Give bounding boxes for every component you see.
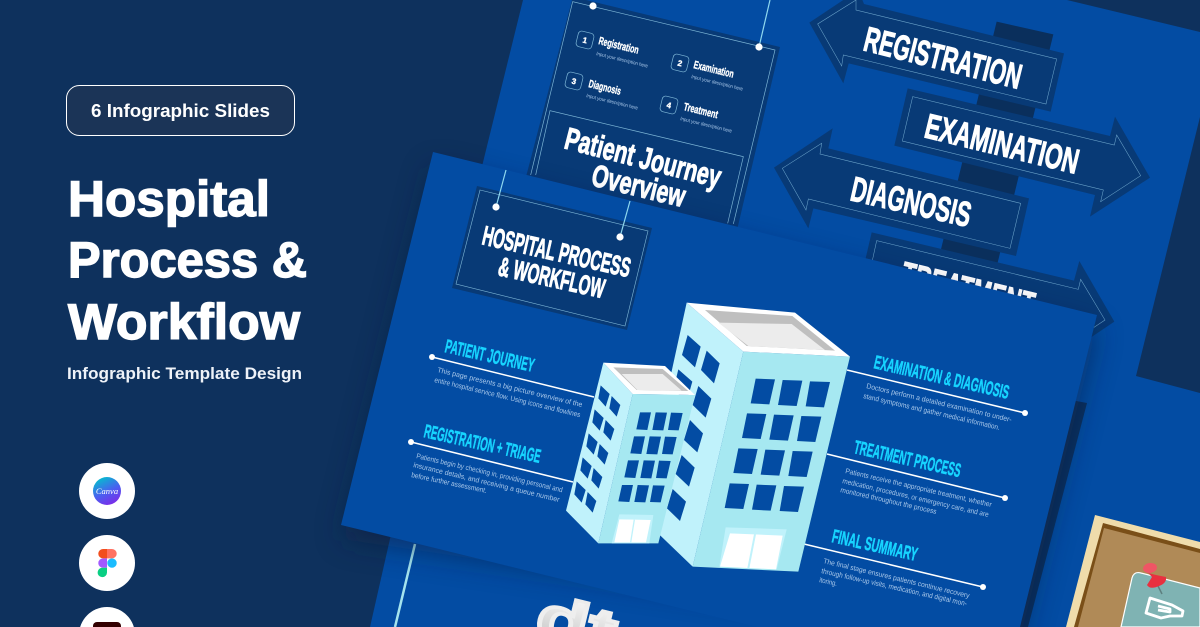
text block: treatment process: monitored throughout the process [840, 485, 938, 516]
step label: diagnosis: Diagnosis [587, 78, 622, 98]
card title line 2: Overview [588, 158, 689, 214]
main slide shadow [341, 166, 1097, 627]
label: examination: EXAMINATION [921, 107, 1083, 182]
panel: back slide patient journey [470, 0, 1200, 627]
icon: number box 4: 4 [666, 101, 673, 111]
sign pole [940, 22, 1053, 267]
step label: examination: Examination [692, 59, 735, 81]
cork inner edge [1074, 523, 1200, 627]
connector lines [408, 354, 1028, 590]
icon: hand [1146, 598, 1183, 618]
cork frame [1066, 515, 1200, 627]
text block: final summary [819, 526, 971, 608]
icon: number box 3: 3 [571, 77, 578, 87]
title: Process & [68, 232, 307, 288]
text block: final summary: FINAL SUMMARY [830, 526, 920, 566]
step label: treatment: Treatment [682, 101, 719, 121]
text block: patient journey: entire hospital service flow. Using icons and flowlines [434, 375, 582, 419]
text block: patient journey: This page presents a big picture overview of the [437, 365, 583, 409]
text block: final summary: itoring. [819, 575, 838, 588]
arrow: diagnosis [774, 128, 1029, 256]
text block: examination and diagnosis [863, 352, 1013, 432]
panel: lower slide [370, 530, 800, 627]
arrow: registration [809, 0, 1064, 112]
shadow strip [1005, 398, 1087, 627]
title: Workflow [68, 294, 300, 350]
icon: canva: Canva [96, 486, 118, 496]
hanging line and pins [589, 0, 770, 51]
signpost arrows [774, 0, 1150, 362]
text block: treatment process: medication, procedures, or emergency care, and are [842, 476, 990, 519]
icon: third tool [79, 607, 135, 627]
label: registration: REGISTRATION [860, 20, 1026, 97]
icon: number box 1 [575, 30, 595, 50]
text block: examination and diagnosis: Doctors perform a detailed examination to under- [866, 381, 1013, 424]
tall building [640, 303, 850, 572]
icon: canva [79, 463, 135, 519]
step description 4: Input your description here [680, 116, 733, 135]
panel: corkboard slide [1005, 398, 1200, 627]
text block: registration and triage: insurance details, and receiving a queue number [413, 460, 561, 504]
cork surface [1078, 528, 1200, 627]
text block: registration and triage: REGISTRATION + TRIAGE [422, 421, 543, 468]
illustration: hospital buildings [566, 303, 850, 572]
badge: slide count [66, 86, 294, 136]
icon: red pin [1142, 562, 1166, 594]
text block: registration and triage: Patients begin by checking in, providing personal and [416, 451, 564, 494]
badge: slide count: 6 Infographic Slides [91, 100, 270, 121]
text block: final summary: through follow-up visits, medication, and digital mon- [821, 566, 968, 608]
icon: figma [79, 535, 135, 591]
paper card [1121, 573, 1200, 627]
label: treatment: TREATMENT [897, 255, 1038, 325]
step label: registration: Registration [597, 35, 640, 57]
title line 1: HOSPITAL PROCESS [480, 221, 634, 283]
icon: number box 4 [659, 95, 679, 115]
icon: number box 1: 1 [582, 36, 589, 46]
icon: number box 2: 2 [677, 59, 684, 69]
arrow: treatment [858, 232, 1114, 362]
title line 2: & WORKFLOW [496, 252, 608, 304]
label: diagnosis: DIAGNOSIS [847, 170, 975, 235]
text block: examination and diagnosis: EXAMINATION & DIAGNOSIS [872, 352, 1011, 404]
text block: examination and diagnosis: stand symptoms and gather medical information. [863, 391, 1001, 432]
icon: number box 3 [564, 71, 584, 91]
icon: number box 2 [670, 53, 690, 73]
text block: treatment process [840, 437, 993, 519]
panel: hospital process title card [452, 170, 652, 330]
text block: treatment process: TREATMENT PROCESS [852, 437, 963, 482]
text block: registration and triage [411, 421, 564, 504]
text block: patient journey [434, 336, 583, 419]
subtitle: Infographic Template Design [67, 365, 302, 383]
accent line [395, 544, 415, 627]
arrow: examination [894, 88, 1150, 217]
text block: registration and triage: before further assessment. [411, 470, 488, 495]
text block: treatment process: Patients receive the appropriate treatment, whether [845, 466, 993, 509]
step description 2: Input your description here [691, 74, 744, 93]
card title: Patient Journey [561, 121, 725, 195]
text block: patient journey: PATIENT JOURNEY [443, 336, 536, 377]
panel: patient journey overview card [520, 0, 780, 260]
panel: main slide [341, 152, 1097, 627]
title [68, 171, 307, 350]
step description 3: Input your description here [586, 93, 639, 112]
small building [566, 363, 695, 543]
title: Hospital [68, 171, 270, 227]
step description 1: Input your description here [596, 51, 649, 70]
pin lines [492, 170, 630, 241]
text block: final summary: The final stage ensures patients continue recovery [823, 556, 971, 600]
